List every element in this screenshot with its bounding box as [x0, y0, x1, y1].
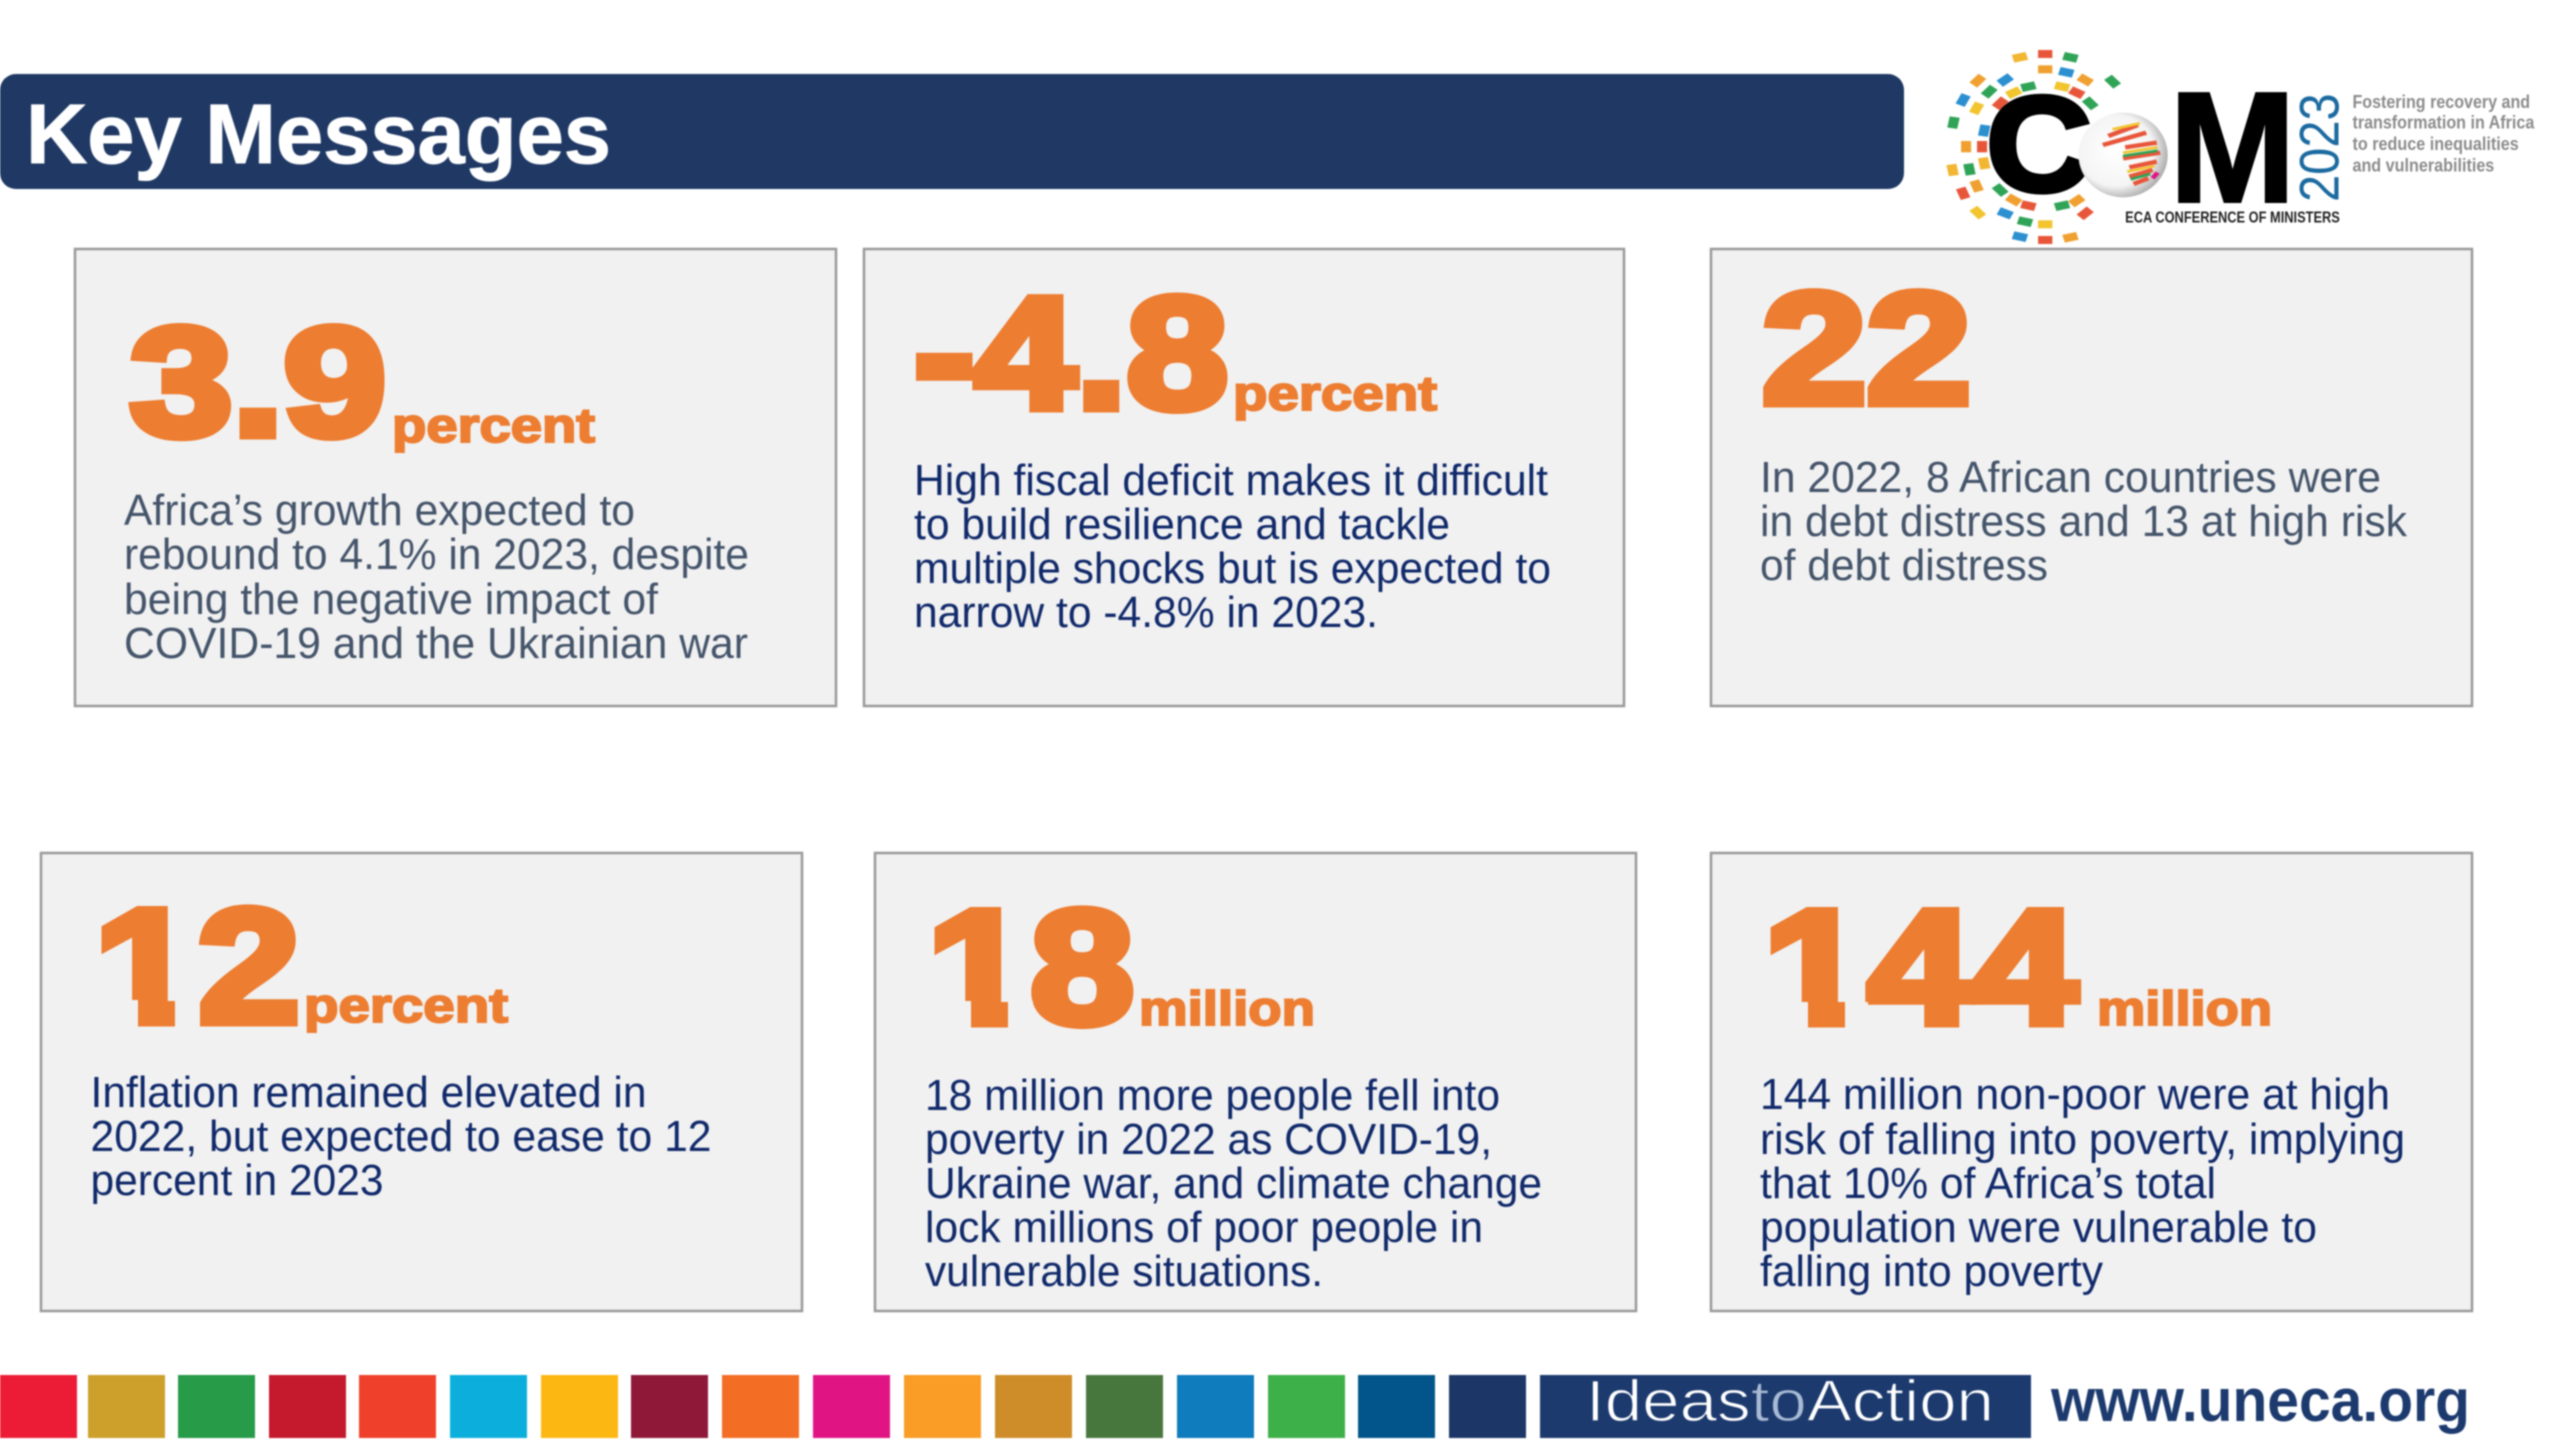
body text: 18 million more people fell into: [925, 1071, 1500, 1120]
body text: [914, 456, 1551, 637]
logo tagline: and vulnerabilities: [2352, 155, 2494, 176]
body text: Inflation remained elevated in: [90, 1068, 646, 1117]
body text: percent in 2023: [90, 1156, 384, 1205]
body text: in debt distress and 13 at high risk: [1760, 497, 2408, 546]
unit percent: percent: [1233, 368, 1437, 421]
body text: [1760, 453, 2408, 590]
statistic 144: 144: [1763, 877, 2077, 1058]
footer slogan banner: [1540, 1369, 2031, 1438]
logo year 2023: 2023: [2289, 93, 2351, 202]
body text: rebound to 4.1% in 2023, despite: [124, 530, 749, 579]
logo caption: ECA CONFERENCE OF MINISTERS: [2125, 208, 2340, 226]
body text: to build resilience and tackle: [914, 500, 1450, 549]
body text: that 10% of Africa’s total: [1760, 1159, 2216, 1208]
unit percent: percent: [304, 980, 508, 1033]
header bar with title: [0, 74, 1904, 189]
body text: High fiscal deficit makes it difficult: [914, 456, 1548, 505]
statistic -4.8: -4.8: [914, 264, 1228, 442]
logo letter C: C: [1986, 69, 2092, 220]
panel: -4.8 percent fiscal deficit: [864, 249, 1624, 706]
panel: 18 million poverty: [875, 853, 1636, 1311]
unit million: million: [2097, 983, 2272, 1036]
statistic 22: 22: [1762, 261, 1971, 437]
body text: COVID-19 and the Ukrainian war: [124, 619, 748, 668]
body text: being the negative impact of: [124, 575, 659, 624]
body text: narrow to -4.8% in 2023.: [914, 588, 1378, 637]
statistic 12: 12: [94, 876, 300, 1057]
panel: 12 percent inflation: [41, 853, 802, 1311]
panel: 144 million at risk: [1711, 853, 2472, 1311]
website address: www.uneca.org: [2050, 1367, 2470, 1434]
panel: 22 debt distress: [1711, 249, 2472, 706]
body text: [124, 486, 749, 668]
title: Key Messages: [26, 87, 611, 181]
footer strip of SDG colour bars: [0, 1375, 1526, 1438]
logo letter M: M: [2169, 59, 2296, 235]
icon: globe with Africa: [2078, 113, 2168, 197]
logo: ECA Conference of Ministers 2023: [1946, 50, 2534, 244]
body text: poverty in 2022 as COVID-19,: [925, 1115, 1492, 1164]
body text: [90, 1068, 712, 1205]
body text: [925, 1071, 1542, 1296]
body text: multiple shocks but is expected to: [914, 544, 1551, 593]
statistic 3.9: 3.9: [130, 296, 386, 468]
body text: [1760, 1070, 2405, 1296]
panel: 3.9 percent growth: [75, 249, 836, 706]
unit percent: percent: [392, 400, 595, 453]
statistic 18: 18: [927, 877, 1134, 1058]
body text: population were vulnerable to: [1760, 1203, 2317, 1252]
logo tagline: [2352, 91, 2534, 176]
unit million: million: [1139, 983, 1315, 1036]
body text: lock millions of poor people in: [925, 1203, 1483, 1252]
body text: 144 million non-poor were at high: [1760, 1070, 2390, 1119]
icon: ring of coloured squares: [1946, 50, 2121, 244]
body text: In 2022, 8 African countries were: [1760, 453, 2381, 502]
body text: vulnerable situations.: [925, 1247, 1323, 1296]
body text: Africa’s growth expected to: [124, 486, 635, 535]
body text: risk of falling into poverty, implying: [1760, 1115, 2405, 1164]
body text: 2022, but expected to ease to 12: [90, 1112, 712, 1161]
slogan text: Ideas toAction: [1586, 1369, 1994, 1434]
body text: Ukraine war, and climate change: [925, 1159, 1542, 1208]
body text: falling into poverty: [1760, 1247, 2103, 1296]
body text: of debt distress: [1760, 541, 2048, 590]
